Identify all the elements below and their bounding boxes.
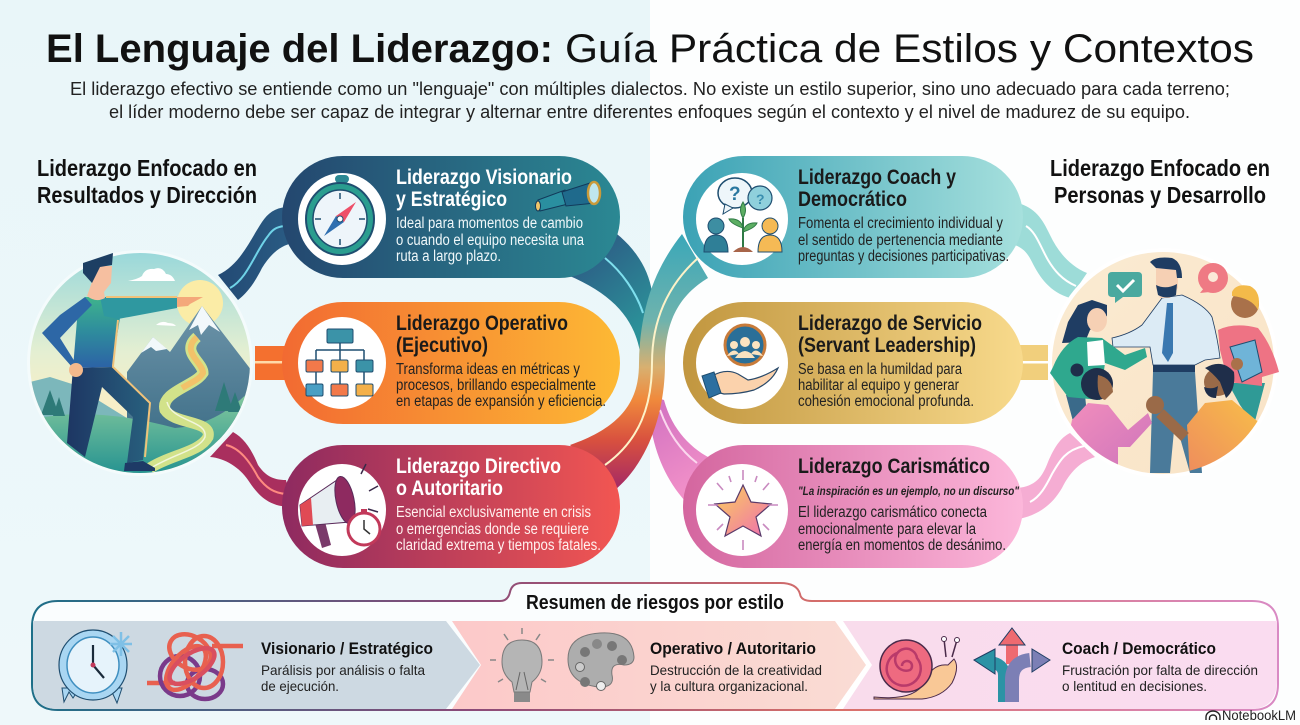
text: operativo: procesos, brillando especialmente	[396, 377, 596, 394]
central arc: crossing band	[570, 234, 708, 490]
text: operativo	[396, 361, 606, 410]
panel: servicio	[683, 302, 1023, 424]
heading: servicio: Liderazgo de Servicio	[798, 312, 982, 335]
panel: visionario	[282, 156, 620, 278]
connector: top right	[1006, 203, 1087, 298]
text: visionario	[396, 215, 584, 265]
icon: people and plant: ?	[729, 184, 741, 205]
sweater	[73, 297, 120, 368]
heading: carismatico: Liderazgo Carismático	[798, 455, 990, 478]
heading: visionario: y Estratégico	[396, 188, 507, 211]
panel: carismatico	[683, 445, 1023, 568]
title: Guía Práctica de Estilos y Contextos	[565, 27, 1254, 71]
text: directivo: Esencial exclusivamente en crisis	[396, 504, 591, 521]
central leader pants	[1150, 372, 1202, 473]
illustration: leader with team	[1048, 248, 1279, 480]
icon: snail	[874, 636, 960, 699]
heading: people and development	[1050, 155, 1270, 208]
icon: star	[696, 464, 788, 556]
heading: results and direction: Liderazgo Enfocado en	[37, 155, 257, 181]
connector: middle right	[1016, 345, 1050, 380]
risk band: visionario	[33, 621, 480, 709]
heading: coach	[798, 166, 956, 211]
panel: operativo	[282, 302, 620, 424]
panel: risk summary	[32, 583, 1278, 710]
text: carismatico: emocionalmente para elevar la	[798, 521, 976, 538]
heading: people and development: Liderazgo Enfocado en	[1050, 155, 1270, 181]
text: directivo	[396, 504, 601, 554]
heading: visionario	[396, 166, 572, 211]
icon: telescope	[536, 182, 600, 211]
text: operativo risk	[650, 639, 822, 694]
risk band: coach	[843, 621, 1277, 709]
text: visionario risk: Parálisis por análisis o falta	[261, 662, 425, 678]
risk band: operativo	[452, 621, 866, 709]
text: operativo risk: Operativo / Autoritario	[650, 639, 816, 658]
connector: bottom left	[210, 432, 292, 507]
text: visionario: Ideal para momentos de cambio	[396, 215, 583, 232]
intro paragraph: El liderazgo efectivo se entiende como un "lenguaje" con múltiples dialectos. No existe un estilo superior, sino uno adecuado para cada terreno;	[70, 78, 1230, 99]
heading: results and direction	[37, 155, 257, 208]
text: operativo risk: Destrucción de la creatividad	[650, 662, 822, 678]
icon: people and plant	[696, 173, 788, 265]
heading: coach: Democrático	[798, 188, 907, 211]
text: servicio: cohesión emocional profunda.	[798, 393, 974, 410]
text: servicio	[798, 361, 974, 410]
panel: directivo	[282, 445, 620, 568]
heading: servicio	[798, 312, 982, 357]
heading: servicio: (Servant Leadership)	[798, 334, 976, 357]
text: carismatico: energía en momentos de desánimo.	[798, 537, 1006, 554]
intro paragraph	[70, 78, 1230, 122]
brand mark: NotebookLM: NotebookLM	[1222, 708, 1296, 723]
text: coach: el sentido de pertenencia mediante	[798, 232, 1003, 249]
front figures clipped by the circle	[1070, 364, 1258, 471]
central arc: bottom right	[648, 395, 714, 502]
text: visionario risk: de ejecución.	[261, 678, 339, 694]
heading: directivo: Liderazgo Directivo	[396, 455, 561, 478]
connector: top left	[218, 207, 294, 300]
text: coach risk: o lentitud en decisiones.	[1062, 678, 1207, 694]
connector: bottom right	[1014, 433, 1095, 520]
text: visionario: o cuando el equipo necesita una	[396, 232, 584, 249]
quote: "La inspiración es un ejemplo, no un discurso"	[798, 484, 1019, 498]
text: coach: Fomenta el crecimiento individual y	[798, 215, 1003, 232]
text: coach risk	[1062, 639, 1258, 694]
icon: frozen clock	[59, 630, 132, 703]
icon: org chart	[298, 317, 386, 409]
icon: hand and team medallion	[696, 317, 788, 409]
icon: forked arrows	[974, 628, 1050, 702]
text: coach risk: Frustración por falta de dirección	[1062, 662, 1258, 678]
text: directivo: claridad extrema y tiempos fatales.	[396, 537, 601, 554]
text: visionario risk: Visionario / Estratégico	[261, 639, 433, 658]
text: operativo risk: y la cultura organizacional.	[650, 678, 808, 694]
text: coach risk: Coach / Democrático	[1062, 639, 1216, 658]
text: visionario risk	[261, 639, 433, 694]
heading: visionario: Liderazgo Visionario	[396, 166, 572, 189]
text: coach: preguntas y decisiones participativas.	[798, 248, 1009, 265]
right man	[1228, 383, 1265, 425]
heading: operativo: Liderazgo Operativo	[396, 312, 568, 335]
icon: megaphone and stopwatch	[298, 464, 386, 556]
heading: people and development: Personas y Desarrollo	[1054, 182, 1266, 208]
title: El Lenguaje del Liderazgo:	[46, 27, 553, 71]
text: operativo: Transforma ideas en métricas y	[396, 361, 580, 378]
heading: risk summary: Resumen de riesgos por estilo	[526, 592, 784, 614]
heading: results and direction: Resultados y Dirección	[37, 182, 257, 208]
woman	[1066, 395, 1088, 425]
text: servicio: habilitar al equipo y generar	[798, 377, 959, 394]
heading: directivo	[396, 455, 561, 500]
connector: middle left	[255, 346, 287, 380]
heading: directivo: o Autoritario	[396, 477, 503, 500]
chat bubbles	[1108, 272, 1142, 303]
panel outline with tab	[32, 583, 1278, 710]
intro paragraph: el líder moderno debe ser capaz de integrar y alternar entre diferentes enfoques según el contexto y el nivel de madurez de su equipo.	[109, 101, 1190, 122]
icon: compass	[298, 173, 386, 265]
text: operativo: en etapas de expansión y eficiencia.	[396, 393, 606, 410]
illustration: leader pointing at mountains	[27, 250, 255, 480]
text: carismatico	[798, 504, 1006, 554]
heading: operativo: (Ejecutivo)	[396, 334, 488, 357]
heading: operativo	[396, 312, 568, 357]
heading: coach: Liderazgo Coach y	[798, 166, 956, 189]
central leader shirt	[1112, 295, 1220, 365]
icon: grey light bulb	[490, 628, 554, 702]
text: servicio: Se basa en la humildad para	[798, 361, 962, 378]
pants	[67, 367, 150, 463]
panel: coach	[683, 156, 1023, 278]
title	[46, 27, 1254, 71]
text: visionario: ruta a largo plazo.	[396, 248, 501, 265]
icon: tangled knot	[147, 627, 243, 699]
text: carismatico: El liderazgo carismático conecta	[798, 504, 987, 521]
icon: grey palette	[568, 633, 634, 690]
text: coach	[798, 215, 1009, 265]
text: directivo: o emergencias donde se requiere	[396, 521, 589, 538]
icon: people and plant: ?	[756, 191, 765, 207]
central arc: top left	[560, 222, 652, 352]
